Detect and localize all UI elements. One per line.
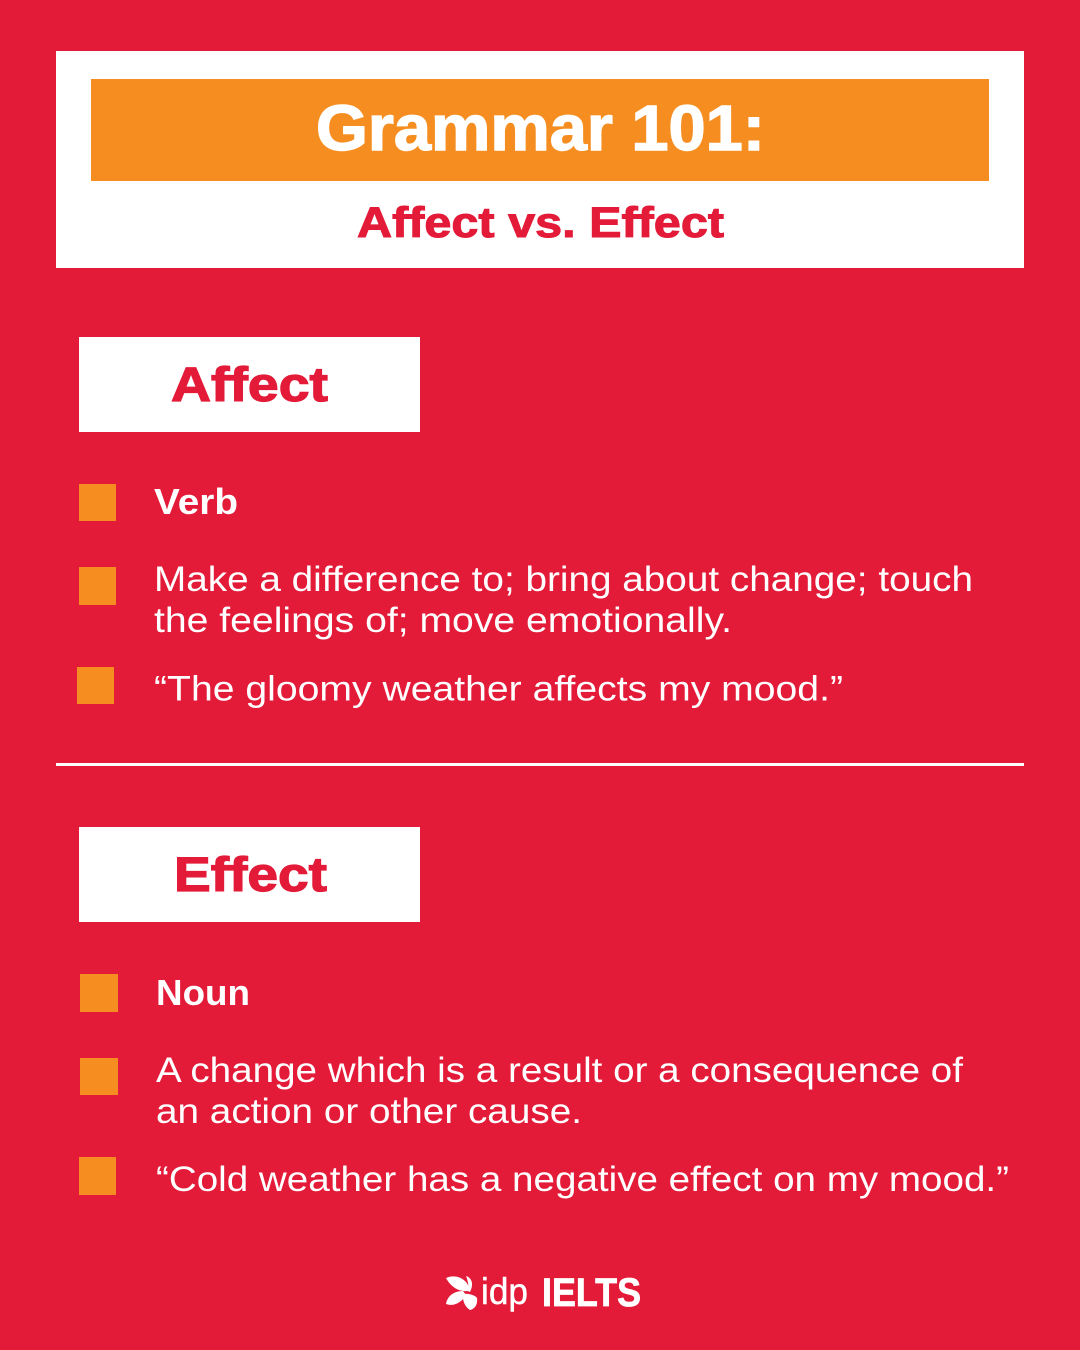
example of effect: “Cold weather has a negative effect on my mood.” [156, 1160, 1009, 1199]
definition of effect [156, 1051, 963, 1131]
definition of effect: A change which is a result or a consequence of [156, 1051, 963, 1090]
title: Grammar 101: [316, 92, 765, 164]
panel: affect [77, 337, 973, 708]
part of speech: noun: Noun [156, 972, 250, 1013]
bullet icon [77, 667, 114, 704]
heading: affect: Affect [171, 359, 328, 412]
subtitle: Affect vs. Effect [357, 199, 724, 247]
panel: effect [79, 827, 1009, 1199]
definition of affect [154, 560, 973, 640]
bullet icon [79, 484, 116, 521]
definition of effect: an action or other cause. [156, 1092, 582, 1131]
definition of affect: the feelings of; move emotionally. [154, 601, 732, 640]
bullet icon [80, 1058, 118, 1095]
title banner [91, 79, 989, 181]
heading: affect [79, 337, 420, 432]
part of speech: verb: Verb [154, 481, 238, 522]
heading: effect [79, 827, 420, 922]
bullet icon [79, 567, 116, 605]
icon: leaves [446, 1276, 477, 1310]
example of affect: “The gloomy weather affects my mood.” [154, 670, 843, 708]
bullet icon [79, 1157, 116, 1195]
wordmark: IELTS: IELTS [542, 1271, 641, 1315]
bullet icon [80, 974, 118, 1012]
title panel [56, 51, 1024, 268]
definition of affect: Make a difference to; bring about change; touch [154, 560, 973, 599]
logo: idp IELTS [446, 1271, 641, 1315]
wordmark: idp: idp [481, 1271, 528, 1312]
heading: effect: Effect [174, 849, 327, 902]
